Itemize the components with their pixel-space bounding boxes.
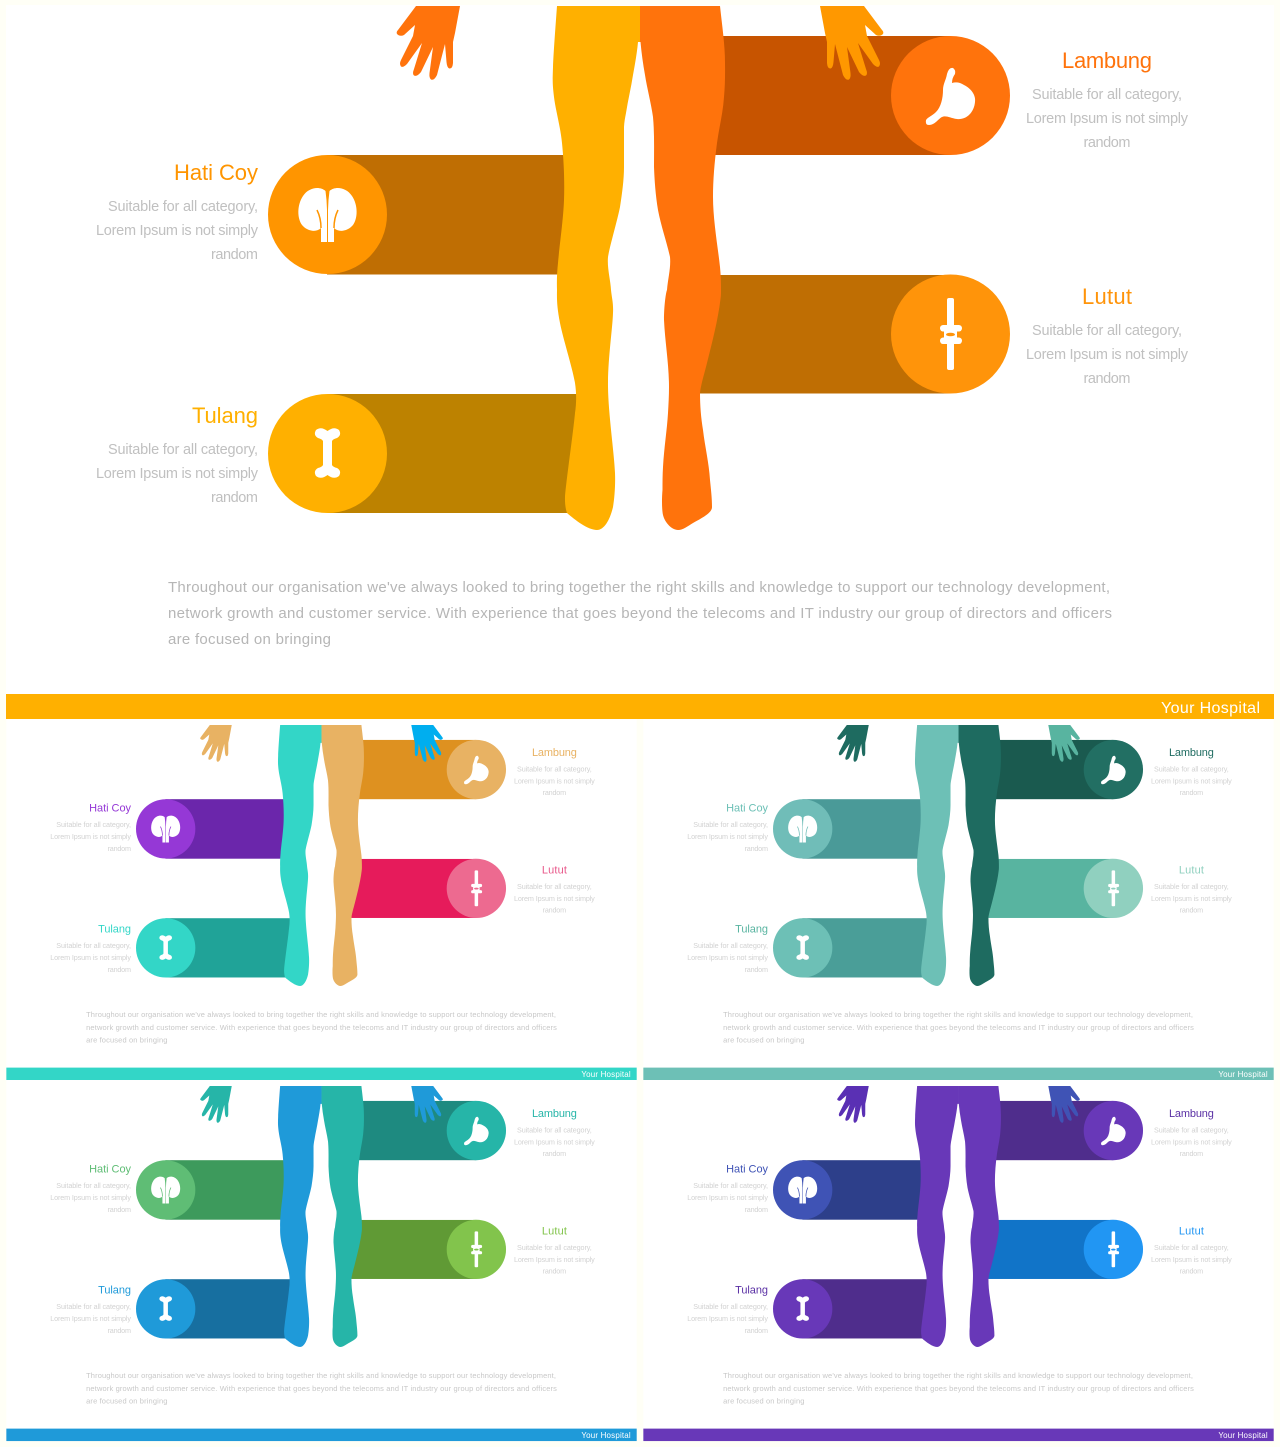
- text: Lambung: Lambung: [532, 1108, 577, 1120]
- text: Lambung: Lambung: [1062, 48, 1152, 73]
- text: Lambung: [1151, 747, 1232, 797]
- paragraph: are focused on bringing: [723, 1397, 804, 1406]
- text: Lutut: random: [1084, 371, 1130, 387]
- text: Hati Coy: random: [108, 844, 131, 853]
- right hand: [1048, 725, 1080, 762]
- left leg: [915, 725, 959, 986]
- text: Lutut: Suitable for all category,: [1154, 882, 1229, 891]
- paragraph: [723, 1010, 1194, 1045]
- text: Lutut: Lutut: [1082, 284, 1132, 309]
- icon: knee: [471, 1231, 482, 1267]
- paragraph: Throughout our organisation we've always looked to bring together the right skills and knowledge to support our technology development,: [86, 1371, 556, 1380]
- pill: Lutut: [988, 859, 1143, 918]
- text: Hati Coy: [50, 803, 132, 853]
- text: Lutut: Lutut: [542, 1225, 567, 1237]
- left leg: [915, 1086, 959, 1347]
- text: Lambung: Suitable for all category,: [1032, 87, 1182, 103]
- text: Tulang: Suitable for all category,: [56, 941, 131, 950]
- pill: Tulang: [773, 918, 930, 977]
- text: Tulang: Tulang: [98, 924, 131, 936]
- pill: Lutut: [700, 274, 1010, 394]
- text: Lutut: [1026, 284, 1189, 387]
- text: Lutut: Suitable for all category,: [517, 1243, 592, 1252]
- right leg: [640, 6, 725, 530]
- text: Lambung: [1026, 48, 1189, 151]
- text: Tulang: random: [745, 1326, 768, 1335]
- paragraph: are focused on bringing: [723, 1036, 804, 1045]
- text: Lutut: Suitable for all category,: [517, 882, 592, 891]
- text: Hati Coy: Suitable for all category,: [56, 820, 131, 829]
- text: Lambung: Lorem Ipsum is not simply: [514, 1137, 595, 1146]
- text: Lambung: random: [1084, 135, 1130, 151]
- text: Lutut: [514, 1225, 595, 1276]
- icon: bone: [796, 935, 809, 960]
- panel: blue and green variant: [6, 1080, 637, 1441]
- text: Hati Coy: [687, 803, 769, 853]
- footer bar: [643, 1068, 1274, 1080]
- pill: Lutut: [351, 859, 506, 918]
- text: Hati Coy: Lorem Ipsum is not simply: [687, 1193, 768, 1202]
- paragraph: Throughout our organisation we've always looked to bring together the right skills and knowledge to support our technology development,: [723, 1010, 1193, 1019]
- text: Tulang: Suitable for all category,: [693, 1302, 768, 1311]
- text: Lambung: Suitable for all category,: [517, 764, 592, 773]
- text: Tulang: Tulang: [735, 924, 768, 936]
- footer bar: [6, 694, 1274, 719]
- text: Lambung: Lorem Ipsum is not simply: [514, 776, 595, 785]
- text: Lambung: [1151, 1108, 1232, 1158]
- text: Lambung: [514, 1108, 595, 1158]
- icon: bone: [796, 1296, 809, 1321]
- footer bar: Your Hospital: [581, 1070, 631, 1079]
- left hand: [397, 6, 460, 80]
- text: Lambung: Lambung: [1169, 1108, 1214, 1120]
- paragraph: Throughout our organisation we've always looked to bring together the right skills and knowledge to support our technology development,: [86, 1010, 556, 1019]
- text: Tulang: Suitable for all category,: [693, 941, 768, 950]
- text: Lambung: Lorem Ipsum is not simply: [1151, 776, 1232, 785]
- text: Lambung: [514, 747, 595, 797]
- pill: Lambung: [351, 740, 506, 799]
- paragraph: [723, 1371, 1194, 1406]
- right leg: [322, 725, 364, 986]
- text: Tulang: Suitable for all category,: [56, 1302, 131, 1311]
- icon: knee: [471, 870, 482, 906]
- text: Hati Coy: Lorem Ipsum is not simply: [96, 223, 259, 239]
- text: Lambung: Lambung: [532, 747, 577, 759]
- paragraph: [168, 579, 1112, 648]
- text: Tulang: random: [108, 1326, 131, 1335]
- text: Lambung: random: [543, 788, 566, 797]
- text: Hati Coy: [50, 1164, 132, 1214]
- text: Lutut: Lorem Ipsum is not simply: [1151, 1255, 1232, 1264]
- text: Lutut: Lutut: [542, 864, 567, 876]
- icon: kidney: [788, 1177, 817, 1204]
- text: Lutut: Lorem Ipsum is not simply: [1151, 894, 1232, 903]
- paragraph: [86, 1010, 557, 1045]
- icon: bone: [315, 428, 340, 478]
- text: Tulang: random: [745, 965, 768, 974]
- right leg: [959, 725, 1001, 986]
- text: Tulang: random: [108, 965, 131, 974]
- text: Tulang: Tulang: [192, 403, 258, 428]
- left hand: [837, 1086, 869, 1123]
- right leg: [959, 1086, 1001, 1347]
- text: Lambung: random: [543, 1149, 566, 1158]
- icon: stomach: [926, 68, 975, 125]
- icon: kidney: [151, 816, 180, 843]
- text: Lutut: [514, 864, 595, 915]
- text: Hati Coy: Hati Coy: [726, 803, 769, 815]
- left hand: [200, 1086, 232, 1123]
- text: Lutut: Lutut: [1179, 1225, 1204, 1237]
- text: Lutut: random: [1180, 906, 1203, 915]
- text: Hati Coy: [96, 160, 259, 263]
- text: Hati Coy: random: [108, 1205, 131, 1214]
- text: Hati Coy: Hati Coy: [89, 1164, 132, 1176]
- left leg: [278, 1086, 322, 1347]
- icon: bone: [159, 935, 172, 960]
- icon: bone: [159, 1296, 172, 1321]
- icon: kidney: [151, 1177, 180, 1204]
- paragraph: Throughout our organisation we've always looked to bring together the right skills and knowledge to support our technology development,: [723, 1371, 1193, 1380]
- pill: Lutut: [988, 1220, 1143, 1279]
- text: Hati Coy: random: [745, 844, 768, 853]
- pill: Tulang: [268, 394, 582, 513]
- pill: Lambung: [700, 36, 1010, 155]
- left hand: [837, 725, 869, 762]
- pill: Hati Coy: [773, 799, 924, 859]
- footer bar: [6, 1429, 637, 1441]
- right hand: [820, 6, 883, 80]
- text: Tulang: Lorem Ipsum is not simply: [50, 1314, 131, 1323]
- text: Lutut: [1151, 864, 1232, 915]
- text: Tulang: [96, 403, 259, 506]
- paragraph: network growth and customer service. With experience that goes beyond the telecoms and IT industry our group of directors and officers: [86, 1023, 557, 1032]
- icon: knee: [940, 298, 962, 370]
- text: Tulang: [687, 924, 768, 974]
- paragraph: are focused on bringing: [168, 631, 331, 648]
- paragraph: network growth and customer service. With experience that goes beyond the telecoms and IT industry our group of directors and officers: [86, 1384, 557, 1393]
- text: Hati Coy: [687, 1164, 769, 1214]
- text: Lutut: Suitable for all category,: [1154, 1243, 1229, 1252]
- pill: Hati Coy: [773, 1160, 924, 1220]
- footer bar: Your Hospital: [1161, 700, 1260, 717]
- text: Lutut: Lorem Ipsum is not simply: [514, 894, 595, 903]
- text: Lambung: Suitable for all category,: [1154, 1125, 1229, 1134]
- pill: Tulang: [136, 1279, 293, 1338]
- text: Hati Coy: Hati Coy: [174, 160, 258, 185]
- text: Tulang: Lorem Ipsum is not simply: [687, 953, 768, 962]
- pill: Lambung: [988, 740, 1143, 799]
- pill: Tulang: [773, 1279, 930, 1338]
- text: Hati Coy: Suitable for all category,: [693, 1181, 768, 1190]
- panel: teal and orange variant: [6, 719, 637, 1080]
- text: Tulang: [50, 1285, 131, 1335]
- text: Lutut: Lutut: [1179, 864, 1204, 876]
- text: Lutut: random: [543, 906, 566, 915]
- text: Lambung: random: [1180, 788, 1203, 797]
- text: Lutut: [1151, 1225, 1232, 1276]
- text: Lutut: random: [1180, 1267, 1203, 1276]
- text: Tulang: Tulang: [735, 1285, 768, 1297]
- panel: green monochrome variant: [643, 719, 1274, 1080]
- footer bar: Your Hospital: [581, 1431, 631, 1440]
- pill: Hati Coy: [268, 155, 570, 274]
- icon: stomach: [464, 1117, 489, 1145]
- right hand: [411, 1086, 443, 1123]
- left leg: [278, 725, 322, 986]
- text: Lambung: Lorem Ipsum is not simply: [1151, 1137, 1232, 1146]
- footer bar: [6, 1068, 637, 1080]
- left hand: [200, 725, 232, 762]
- icon: stomach: [1101, 1117, 1126, 1145]
- text: Tulang: Lorem Ipsum is not simply: [50, 953, 131, 962]
- text: Tulang: Tulang: [98, 1285, 131, 1297]
- icon: knee: [1108, 1231, 1119, 1267]
- text: Hati Coy: random: [745, 1205, 768, 1214]
- text: Tulang: Lorem Ipsum is not simply: [687, 1314, 768, 1323]
- text: Hati Coy: Lorem Ipsum is not simply: [50, 1193, 131, 1202]
- text: Tulang: Suitable for all category,: [108, 442, 258, 458]
- text: Tulang: [687, 1285, 768, 1335]
- paragraph: network growth and customer service. With experience that goes beyond the telecoms and IT industry our group of directors and officers: [723, 1384, 1194, 1393]
- text: Tulang: Lorem Ipsum is not simply: [96, 466, 259, 482]
- text: Lutut: Suitable for all category,: [1032, 323, 1182, 339]
- text: Lambung: random: [1180, 1149, 1203, 1158]
- pill: Lambung: [351, 1101, 506, 1160]
- footer bar: [643, 1429, 1274, 1441]
- footer bar: Your Hospital: [1218, 1070, 1268, 1079]
- paragraph: Throughout our organisation we've always looked to bring together the right skills and knowledge to support our technology development,: [168, 579, 1110, 596]
- icon: kidney: [298, 188, 357, 242]
- pill: Tulang: [136, 918, 293, 977]
- panel: main yellow-orange slide: [6, 5, 1274, 719]
- text: Lutut: random: [543, 1267, 566, 1276]
- text: Lambung: Lorem Ipsum is not simply: [1026, 111, 1189, 127]
- text: Hati Coy: Suitable for all category,: [56, 1181, 131, 1190]
- text: Hati Coy: Lorem Ipsum is not simply: [687, 832, 768, 841]
- pill: Hati Coy: [136, 799, 287, 859]
- icon: stomach: [464, 756, 489, 784]
- pill: Lutut: [351, 1220, 506, 1279]
- text: Lambung: Suitable for all category,: [1154, 764, 1229, 773]
- text: Hati Coy: random: [211, 247, 258, 263]
- text: Tulang: [50, 924, 131, 974]
- text: Tulang: random: [211, 490, 258, 506]
- paragraph: network growth and customer service. With experience that goes beyond the telecoms and IT industry our group of directors and officers: [168, 605, 1112, 622]
- text: Hati Coy: Suitable for all category,: [693, 820, 768, 829]
- icon: knee: [1108, 870, 1119, 906]
- right hand: [411, 725, 443, 762]
- pill: Hati Coy: [136, 1160, 287, 1220]
- text: Lambung: Suitable for all category,: [517, 1125, 592, 1134]
- icon: kidney: [788, 816, 817, 843]
- paragraph: are focused on bringing: [86, 1397, 167, 1406]
- paragraph: are focused on bringing: [86, 1036, 167, 1045]
- paragraph: network growth and customer service. With experience that goes beyond the telecoms and IT industry our group of directors and officers: [723, 1023, 1194, 1032]
- icon: stomach: [1101, 756, 1126, 784]
- pill: Lambung: [988, 1101, 1143, 1160]
- left leg: [553, 6, 640, 530]
- right leg: [322, 1086, 364, 1347]
- text: Hati Coy: Hati Coy: [726, 1164, 769, 1176]
- panel: purple variant: [643, 1080, 1274, 1441]
- text: Lutut: Lorem Ipsum is not simply: [1026, 347, 1189, 363]
- footer bar: Your Hospital: [1218, 1431, 1268, 1440]
- text: Hati Coy: Suitable for all category,: [108, 199, 258, 215]
- text: Lambung: Lambung: [1169, 747, 1214, 759]
- text: Hati Coy: Lorem Ipsum is not simply: [50, 832, 131, 841]
- text: Hati Coy: Hati Coy: [89, 803, 132, 815]
- text: Lutut: Lorem Ipsum is not simply: [514, 1255, 595, 1264]
- paragraph: [86, 1371, 557, 1406]
- right hand: [1048, 1086, 1080, 1123]
